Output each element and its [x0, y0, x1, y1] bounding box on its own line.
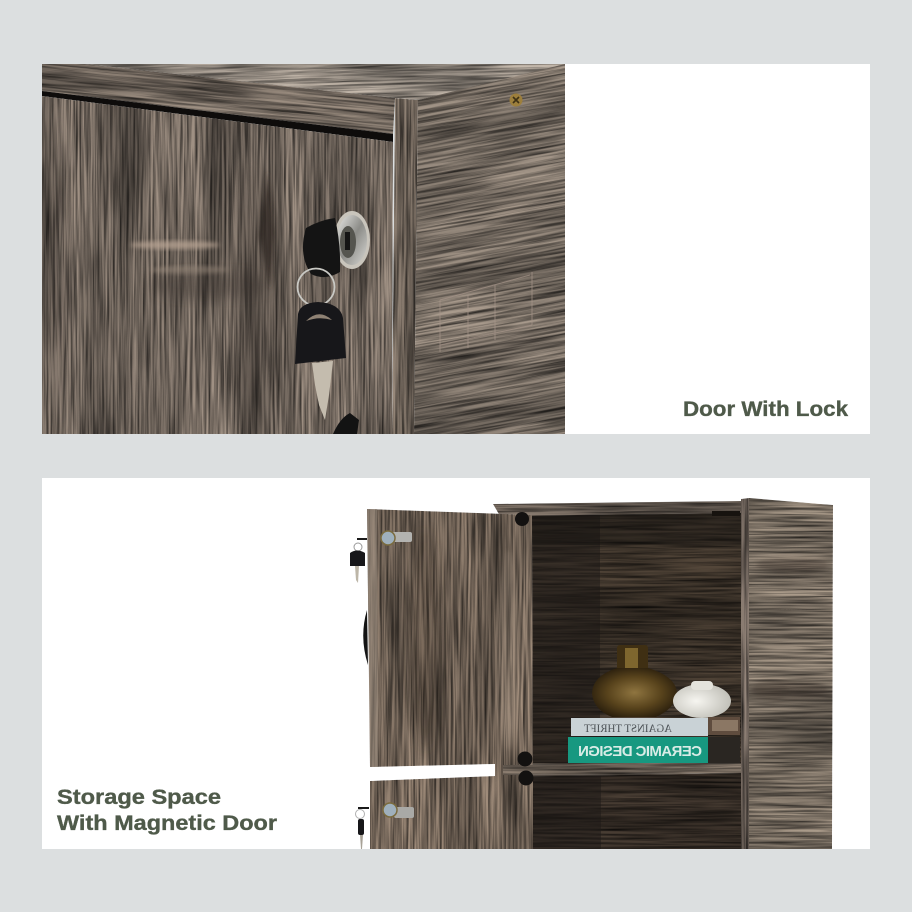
panel: storage space [42, 478, 870, 849]
shelf front edge [503, 763, 741, 775]
icon: key ring [298, 268, 334, 306]
photo: open cabinet [350, 498, 833, 849]
icon: lower key tip [333, 413, 359, 434]
caption: storage space with magnetic door: Storage Space [57, 786, 221, 809]
icon: lower hinge [518, 770, 534, 786]
icon: lower cam lock [383, 803, 414, 818]
icon: door handle edge [363, 610, 368, 665]
side panel grain marks [752, 558, 828, 701]
white pot [673, 681, 731, 718]
white panel bottom [42, 478, 870, 849]
icon: upper cam lock [381, 531, 412, 545]
caption: storage space with magnetic door: With Magnetic Door [57, 812, 277, 835]
icon: upper key [350, 539, 367, 583]
icon: hanging key [295, 302, 346, 420]
cabinet top board [493, 501, 741, 516]
door grain marks [52, 110, 275, 430]
icon: lock cylinder [334, 211, 370, 269]
white caption area top [565, 64, 870, 434]
caption: storage space with magnetic door [57, 786, 277, 835]
icon: lower key [356, 808, 369, 849]
book: Ceramic Design [568, 737, 740, 763]
book title mirrored: AGAINST THRIFT [583, 721, 672, 735]
cabinet top surface [86, 64, 565, 100]
open upper door [367, 509, 533, 767]
right post edge [741, 498, 749, 849]
side routed marks [440, 272, 532, 352]
photo: cabinet corner with lock [42, 64, 565, 434]
shelf [533, 763, 738, 776]
bronze vase [592, 645, 677, 717]
cabinet interior upper [528, 510, 742, 767]
side panel [414, 64, 565, 434]
book title mirrored: CERAMIC DESIGN [578, 743, 702, 760]
icon: shelf hinge [518, 752, 532, 766]
corner post [392, 98, 418, 434]
book: Against Thrift [571, 717, 740, 736]
icon: upper hinge [515, 512, 529, 526]
panel: door with lock [0, 0, 870, 486]
front top rail [42, 64, 395, 134]
door face [42, 96, 393, 434]
icon: screw [510, 94, 522, 106]
icon: key inserted [303, 218, 340, 277]
caption: door with lock: Door With Lock [683, 398, 848, 421]
door gap [42, 91, 393, 142]
right side panel [749, 498, 833, 849]
lower door [370, 763, 533, 849]
cabinet interior lower [528, 771, 742, 849]
